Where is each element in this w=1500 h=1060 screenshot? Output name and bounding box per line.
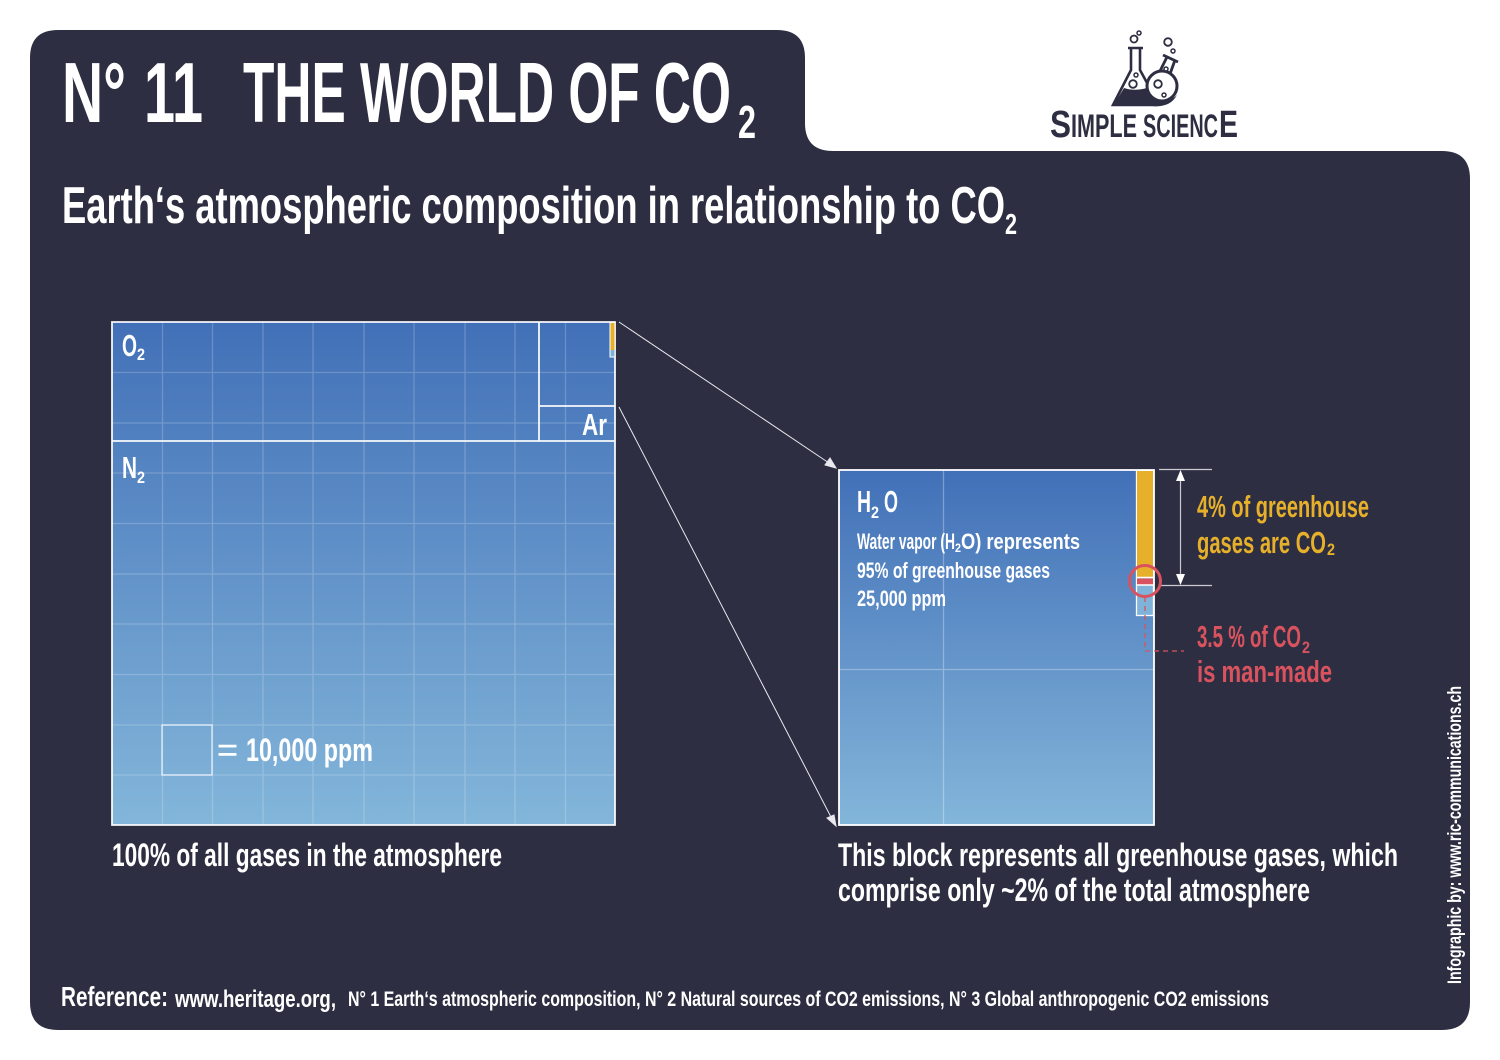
label H2O xyxy=(857,484,898,522)
caption: all gases: 100% of all gases in the atmosphere xyxy=(112,837,502,873)
label H2O: 2 xyxy=(871,503,879,522)
callout: 3.5% man-made: is man-made xyxy=(1197,654,1332,689)
block outline xyxy=(839,470,1154,825)
reference line xyxy=(61,981,1269,1013)
callout: 3.5% man-made: 3.5 % of CO xyxy=(1197,619,1301,654)
label N2: 2 xyxy=(137,468,145,487)
block fill xyxy=(839,470,1154,825)
arrows: zoom from small block to greenhouse block xyxy=(619,322,836,826)
water vapor text: 95% of greenhouse gases xyxy=(857,558,1050,583)
legend: 10,000 ppm: = xyxy=(217,732,238,768)
block fill xyxy=(112,322,615,825)
callout: 4% of greenhouse gases: gases are CO xyxy=(1197,525,1326,560)
label N2: N xyxy=(122,450,137,485)
subtitle xyxy=(62,177,1017,241)
callout: 4% of greenhouse gases xyxy=(1197,489,1369,560)
logo wordmark: SCIENC xyxy=(1143,108,1218,144)
caption: greenhouse gases xyxy=(838,837,1398,908)
title: N° xyxy=(62,46,126,141)
water vapor text: 2 xyxy=(955,541,961,555)
callout: 3.5% man-made: 2 xyxy=(1302,638,1310,657)
label H2O: O xyxy=(884,484,898,519)
logo wordmark: E xyxy=(1219,104,1238,146)
reference line: Reference: xyxy=(61,981,168,1012)
credit: Infographic by: www.ric-communications.ch xyxy=(1445,686,1466,984)
subtitle: 2 xyxy=(1005,209,1017,241)
icon: flasks xyxy=(1113,31,1178,106)
legend: 10,000 ppm: 10,000 ppm xyxy=(246,732,373,768)
label H2O: H xyxy=(857,484,871,519)
callout: 4% of greenhouse gases: 4% of greenhouse xyxy=(1197,489,1369,524)
logo wordmark xyxy=(1050,104,1238,146)
title: 2 xyxy=(738,96,756,148)
grid xyxy=(112,322,615,825)
label O2: O xyxy=(122,328,137,363)
callout: 4% of greenhouse gases: 2 xyxy=(1327,540,1335,559)
water vapor text xyxy=(857,529,1080,611)
label Ar: Ar xyxy=(582,407,607,442)
CO2 bar xyxy=(1136,470,1154,616)
block outlines xyxy=(112,322,615,825)
caption: greenhouse gases: comprise only ~2% of the total atmosphere xyxy=(838,872,1310,908)
subtitle: Earth‘s atmospheric composition in relationship to CO xyxy=(62,177,1005,235)
water vapor text: 25,000 ppm xyxy=(857,586,946,611)
label O2: 2 xyxy=(137,345,145,364)
title: THE WORLD OF CO xyxy=(243,46,731,141)
callout: 3.5% man-made xyxy=(1197,619,1332,689)
legend: 10,000 ppm xyxy=(162,725,373,775)
logo wordmark: IMPLE xyxy=(1071,108,1137,144)
highlight circle and dashed leader xyxy=(1130,566,1184,651)
logo: Simple Science xyxy=(1050,31,1238,146)
water vapor text: O) represents xyxy=(961,529,1080,554)
panel: all atmospheric gases block xyxy=(112,322,615,825)
measure bracket: 4% xyxy=(1159,470,1212,586)
title: 11 xyxy=(144,46,203,141)
logo wordmark: S xyxy=(1050,104,1071,146)
panel: greenhouse gases block xyxy=(839,470,1154,825)
CO2 bar in argon square xyxy=(610,323,615,357)
reference line: www.heritage.org, xyxy=(174,986,336,1013)
grid xyxy=(839,470,1154,825)
title xyxy=(62,46,756,148)
water vapor text: Water vapor (H xyxy=(857,529,955,554)
